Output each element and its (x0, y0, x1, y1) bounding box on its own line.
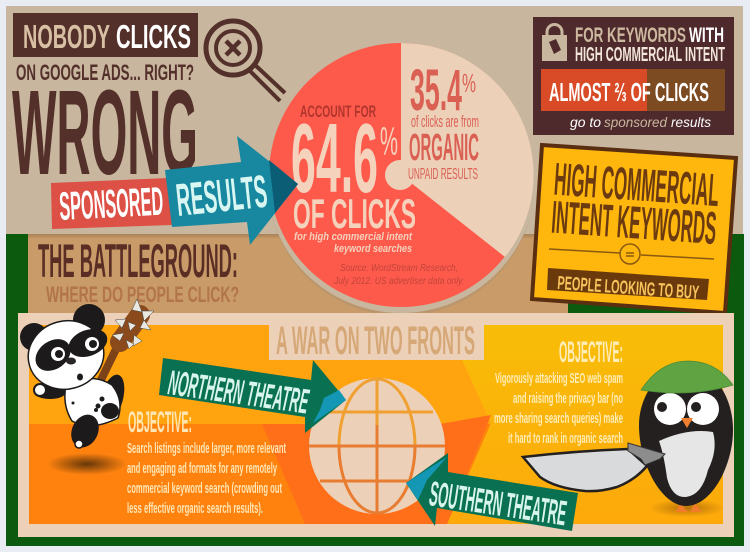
panel: a war on two fronts (18, 313, 734, 537)
pie chart (266, 43, 536, 316)
subheading: where do people click: WHERE DO PEOPLE CLICK? (46, 282, 239, 307)
text block: right objective: and raising the privacy bar (no (513, 390, 623, 407)
top beige panel (6, 6, 743, 234)
icon: lock with tag (542, 25, 567, 61)
text block: right objective (494, 336, 623, 447)
pie chart: ORGANIC (409, 127, 479, 169)
source note: July 2012. US advertiser data only. (333, 275, 464, 287)
arrow: northern theatre (159, 358, 346, 433)
text block: right objective: Vigorously attacking SEO web spam (495, 370, 623, 387)
icon: magnifier with x (206, 21, 285, 101)
panel: high commercial intent stat: FOR KEYWORDS (575, 24, 686, 47)
text block: left objective: OBJECTIVE: (128, 406, 192, 439)
green frame (6, 234, 744, 546)
helmet (641, 361, 733, 393)
sword (523, 449, 647, 491)
battleground tan band (28, 234, 568, 314)
text block: left objective: Search listings include larger, more relevant (127, 440, 286, 457)
penguin feet (676, 503, 702, 512)
caption: go to sponsored results: go to (570, 114, 601, 130)
text block: left objective: commercial keyword search (crowding out (127, 480, 282, 497)
label: account for 64.6 percent: % (380, 120, 398, 164)
label: 35.4 percent organic: 35.4 (410, 58, 462, 123)
sign: high commercial intent keywords (532, 145, 736, 313)
illustration: panda with club (20, 299, 154, 475)
label: people looking to buy (547, 268, 709, 304)
label: account for 64.6 percent (291, 102, 416, 255)
text block: left objective: less effective organic search results). (127, 500, 263, 517)
panel: high commercial intent stat: WITH (689, 24, 724, 47)
heading: nobody clicks (13, 13, 198, 57)
banner: sponsored (51, 178, 172, 229)
club (99, 299, 154, 384)
text: THE BATTLEGROUND: (38, 234, 238, 287)
source note: Source: WordStream Research, (340, 262, 458, 274)
text block: right objective: more sharing search queries) make (494, 410, 623, 427)
source note (333, 262, 464, 287)
label: 35.4 percent organic: UNPAID RESULTS (408, 166, 478, 183)
panda body (95, 372, 129, 424)
arrow: southern theatre (406, 453, 578, 533)
arrow: results (165, 136, 298, 245)
label: 35.4 percent organic: % (462, 68, 476, 98)
stat bar: almost two thirds (541, 69, 725, 111)
label: account for 64.6 percent: for high commercial intent (294, 231, 413, 243)
panda head (20, 323, 48, 351)
text: NORTHERN THEATRE (166, 363, 312, 422)
label: 35.4 percent organic: of clicks are from (411, 112, 479, 131)
penguin body (639, 366, 733, 506)
label: account for 64.6 percent: OF CLICKS (293, 190, 416, 237)
caption: go to sponsored results: sponsored (604, 114, 668, 130)
label: account for 64.6 percent: ACCOUNT FOR (300, 102, 376, 121)
label: account for 64.6 percent: keyword searches (334, 243, 412, 255)
text block: left objective (127, 406, 286, 517)
penguin eyes (654, 393, 686, 425)
text: SPONSORED (58, 180, 164, 229)
text: OBJECTIVE: (559, 336, 623, 369)
panel: high commercial intent stat (533, 17, 734, 135)
label: account for 64.6 percent: 64.6 (291, 103, 378, 213)
icon: globe (309, 378, 445, 514)
heading: nobody clicks: CLICKS (116, 18, 191, 55)
heading: nobody clicks: NOBODY (23, 18, 110, 55)
text block: right objective: it hard to rank in organic search (508, 430, 623, 447)
equals divider (549, 244, 714, 264)
subheading: on google ads: ON GOOGLE ADS... RIGHT? (16, 60, 194, 85)
arrow: results: RESULTS (174, 165, 270, 226)
panel: a war on two fronts: A WAR ON TWO FRONTS (276, 319, 475, 363)
text block: left objective: and engaging ad formats for any remotely (127, 460, 277, 477)
text: WRONG (12, 64, 198, 200)
caption: go to sponsored results (570, 114, 711, 130)
label: 35.4 percent organic (408, 58, 479, 183)
illustration: penguin with sword (523, 361, 733, 517)
caption: go to sponsored results: results (671, 114, 711, 130)
